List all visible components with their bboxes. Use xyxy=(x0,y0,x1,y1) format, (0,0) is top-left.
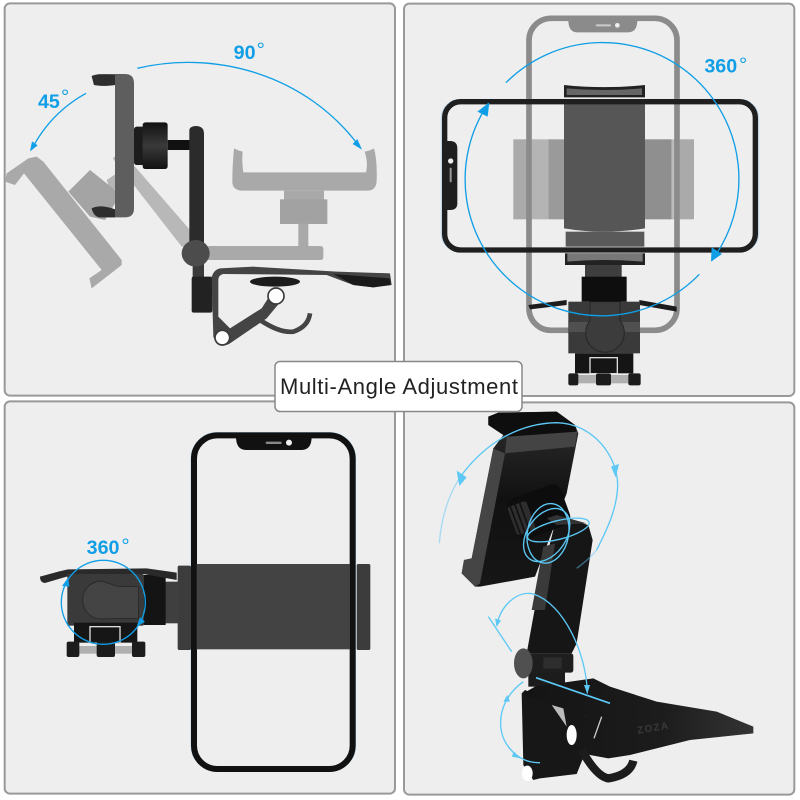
panel: 360 rotation front view xyxy=(404,4,794,396)
clip mount xyxy=(40,568,178,657)
label: 360 degrees: 360 xyxy=(704,56,737,78)
label: 360 degrees: ° xyxy=(121,535,130,558)
label: 90 degrees xyxy=(234,39,265,64)
arrow: knob rotation orbits xyxy=(514,500,591,570)
main phone holder xyxy=(92,74,191,217)
label: 90 degrees: ° xyxy=(257,39,265,62)
label: 45 degrees: ° xyxy=(61,86,69,109)
clip base xyxy=(528,263,677,385)
arrow: rotation circle xyxy=(465,43,739,316)
phone outline horizontal xyxy=(441,99,759,252)
ghost holder tilted left xyxy=(5,154,190,288)
phone outline xyxy=(191,433,355,771)
dashboard clip xyxy=(522,678,753,781)
arrow: rotation circle xyxy=(61,560,145,644)
arrow: clip opening arc xyxy=(501,682,540,763)
panel: adjustment points perspective view xyxy=(404,402,794,795)
phone holder xyxy=(178,564,370,650)
arrow: arm fold arc xyxy=(488,593,610,703)
swivel arm xyxy=(505,482,593,687)
title label xyxy=(275,362,522,412)
title label: Multi-Angle Adjustment xyxy=(280,374,518,399)
label: 45 degrees: 45 xyxy=(38,91,60,113)
arrow: 90 degree arc xyxy=(137,62,362,150)
panel: portrait orientation side view xyxy=(5,401,395,794)
swivel arm and clip xyxy=(182,126,392,345)
label: 45 degrees xyxy=(38,86,69,113)
label: 360 degrees: ° xyxy=(739,54,747,77)
label: 360 degrees: 360 xyxy=(87,537,120,559)
phone holder xyxy=(564,85,645,265)
phone holder xyxy=(462,412,578,587)
ghost holder rotated right xyxy=(207,148,377,260)
arrow: holder tilt arcs xyxy=(439,423,619,568)
phone outline vertical ghost xyxy=(529,18,677,330)
label: 360 degrees xyxy=(87,535,130,559)
brand mark: ZOZA xyxy=(636,721,670,737)
ghost holder horizontal xyxy=(513,139,694,219)
label: 90 degrees: 90 xyxy=(234,42,256,64)
arrow: 45 degree arc xyxy=(30,93,86,151)
panel: tilt angles side view xyxy=(5,3,395,396)
